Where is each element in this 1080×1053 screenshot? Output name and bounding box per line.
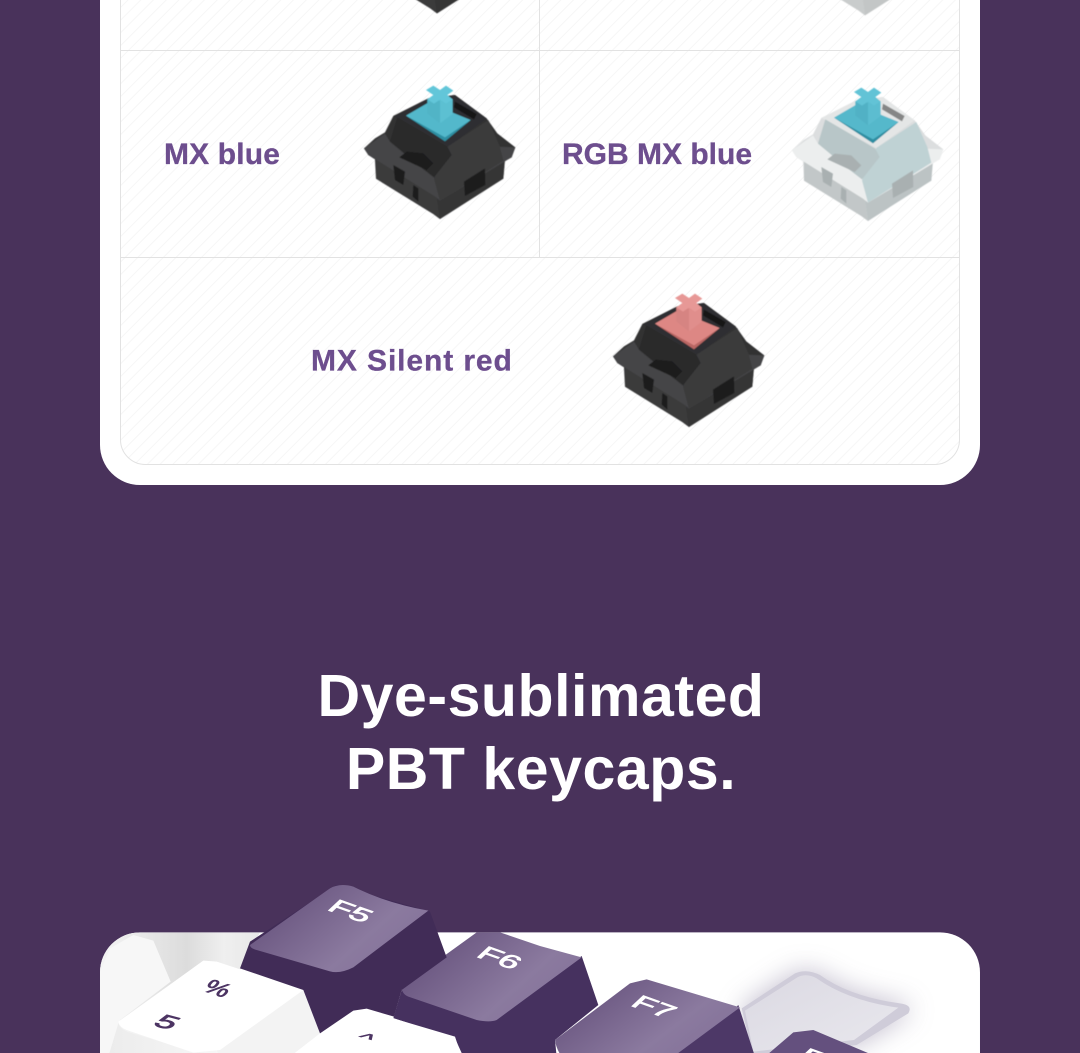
label: RGB MX blue: RGB MX blue <box>562 138 752 171</box>
photo card background <box>100 932 980 1053</box>
legend: caret: ^ <box>349 1031 381 1046</box>
grey backdrop at left <box>100 932 260 1020</box>
label: MX Silent red: MX Silent red <box>311 344 513 378</box>
legend: F5: F5 <box>322 896 379 927</box>
key: caret <box>358 1018 462 1053</box>
key: ghost transparent <box>742 971 910 1053</box>
key: 5 <box>108 961 320 1053</box>
heading <box>317 663 765 802</box>
icon: RGB MX blue switch <box>792 88 943 221</box>
key: F5 overlapping the card edge <box>240 885 447 1033</box>
legend: F6: F6 <box>471 942 528 974</box>
key: left edge <box>118 935 170 1022</box>
key: F7 <box>555 979 755 1053</box>
key: F8 <box>769 1030 868 1053</box>
switch fragment: top row left <box>361 0 512 13</box>
panel: switch options card <box>100 0 980 485</box>
heading: PBT keycaps. <box>346 736 736 802</box>
inner hatched table <box>120 0 960 464</box>
heading: Dye-sublimated <box>317 663 765 729</box>
icon: MX blue switch <box>364 86 515 219</box>
icon: MX Silent red switch <box>613 294 764 427</box>
legend: percent: % <box>198 976 237 1002</box>
key: F6 <box>393 932 598 1053</box>
legend: F7: F7 <box>625 991 682 1023</box>
legend: 5: 5 <box>147 1011 186 1034</box>
panel: keycaps photo <box>97 885 980 1053</box>
card outer white panel <box>100 0 980 485</box>
switch fragment: top row right <box>789 0 940 15</box>
label: MX blue: MX blue <box>164 138 280 171</box>
